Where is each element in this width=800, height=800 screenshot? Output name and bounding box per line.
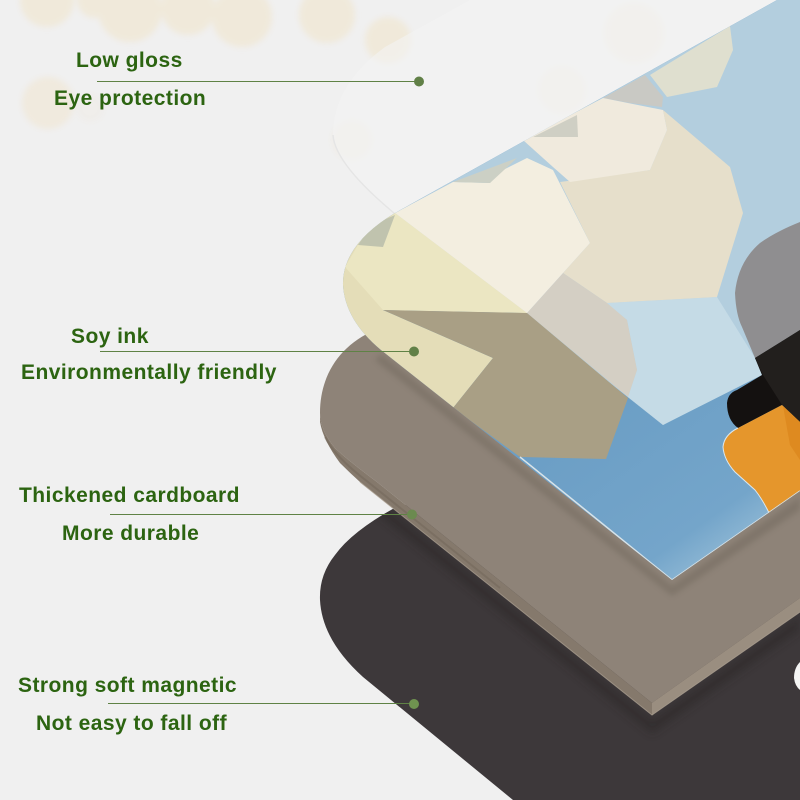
label: environmentally friendly: Environmentally friendly <box>21 361 277 384</box>
leader: low gloss <box>97 76 424 86</box>
label: strong soft magnetic: Strong soft magnetic <box>18 674 237 697</box>
label: eye protection: Eye protection <box>54 87 206 110</box>
grey sliver <box>453 158 517 183</box>
printed layer <box>330 0 800 600</box>
leader: magnetic <box>108 699 419 709</box>
label: low gloss: Low gloss <box>76 49 183 72</box>
gloss film over background <box>333 0 800 218</box>
cardboard layer <box>320 300 800 734</box>
film-covered grey beige <box>527 273 637 397</box>
upper grey shape <box>603 75 663 107</box>
upper cream shape <box>650 26 733 97</box>
beads background <box>20 0 664 160</box>
label: thickened cardboard: Thickened cardboard <box>19 484 240 507</box>
cardboard top face <box>320 300 800 703</box>
big beige shape <box>560 110 743 303</box>
black shape <box>727 330 800 428</box>
leader lines <box>97 76 424 709</box>
card white edge <box>520 457 800 580</box>
label: not easy to fall off: Not easy to fall off <box>36 712 227 735</box>
film-covered cream <box>395 158 590 313</box>
light beige shape <box>523 98 667 182</box>
grey notch <box>533 115 578 137</box>
leader: cardboard <box>110 510 417 520</box>
leader: soy ink <box>100 346 419 356</box>
label: more durable: More durable <box>62 522 199 545</box>
label: soy ink: Soy ink <box>71 325 149 348</box>
cardboard thick edge <box>320 413 800 715</box>
blue base <box>330 0 800 600</box>
grey rounded shape <box>735 222 800 358</box>
printed layer shadow <box>375 354 800 596</box>
tan weave shape <box>383 310 628 459</box>
magnetic layer <box>320 500 800 800</box>
orange shape <box>723 405 800 515</box>
cream corner <box>335 213 527 408</box>
pale blue patch <box>606 297 762 425</box>
blue under film <box>395 0 800 425</box>
